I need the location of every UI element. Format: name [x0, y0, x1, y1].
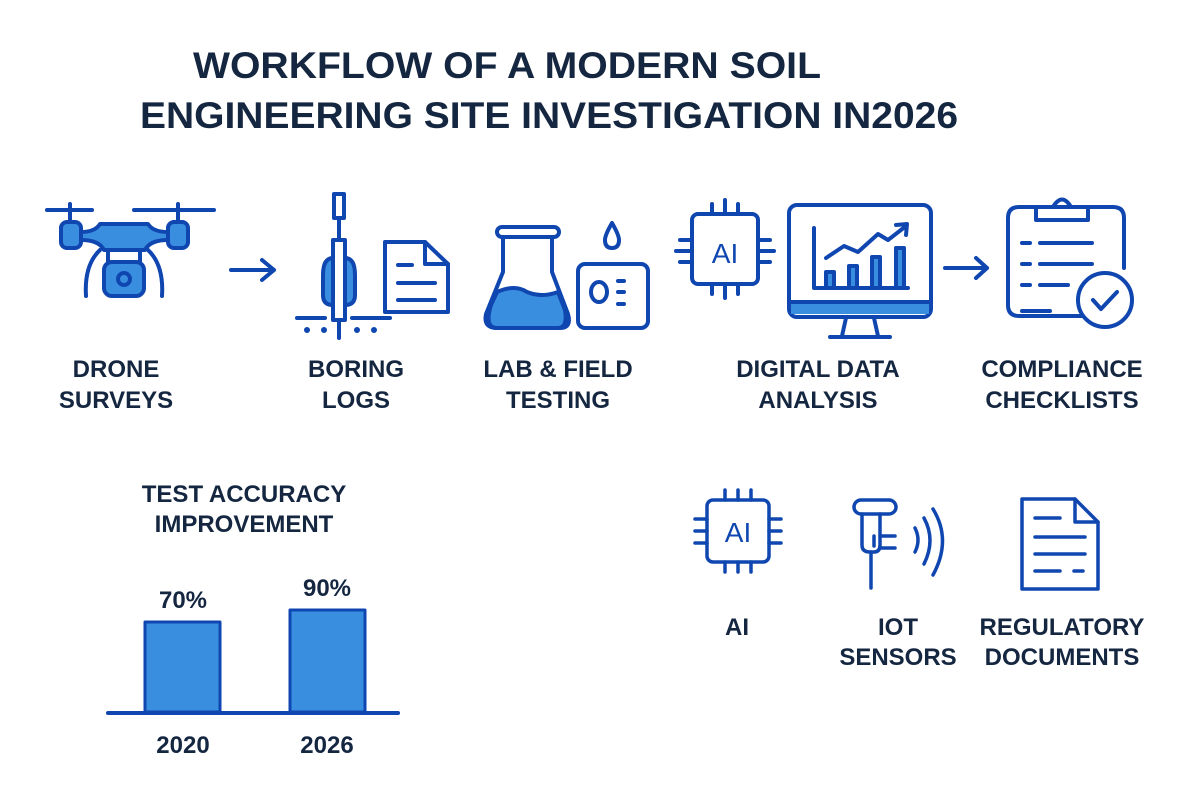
- chip text: [712, 238, 751, 548]
- icon: regulatory document: [1022, 499, 1098, 589]
- labels: technologies: AI: [725, 614, 749, 641]
- labels: workflow steps: LOGS: [322, 387, 390, 414]
- labels: workflow steps: LAB & FIELD: [483, 356, 633, 383]
- labels: workflow steps: CHECKLISTS: [985, 387, 1139, 414]
- arrow 2: [945, 258, 987, 278]
- labels: workflow steps: DIGITAL DATA: [736, 356, 900, 383]
- labels: workflow steps: BORING: [308, 356, 404, 383]
- labels: workflow steps: TESTING: [506, 387, 610, 414]
- chart values and years: 70%: [159, 587, 207, 614]
- icon: AI chip: [676, 200, 774, 298]
- chart values and years: 2026: [300, 732, 354, 759]
- labels: workflow steps: DRONE: [73, 356, 159, 383]
- labels: technologies: DOCUMENTS: [985, 644, 1139, 671]
- chart values and years: 90%: [303, 575, 351, 602]
- title: [140, 45, 958, 136]
- icon: IoT sensor: [854, 500, 942, 588]
- icon: boring rig: [297, 194, 448, 338]
- chart title: IMPROVEMENT: [155, 511, 334, 538]
- labels: workflow steps: COMPLIANCE: [981, 356, 1143, 383]
- labels: workflow steps: ANALYSIS: [758, 387, 878, 414]
- chip text: AI: [712, 238, 738, 269]
- chart title: TEST ACCURACY: [142, 481, 346, 508]
- arrow 1: [231, 260, 274, 280]
- icon: flask and tester: [485, 223, 648, 328]
- labels: technologies: IOT: [878, 614, 918, 641]
- labels: workflow steps: [59, 356, 1143, 414]
- labels: workflow steps: SURVEYS: [59, 387, 173, 414]
- icon: compliance clipboard: [1008, 200, 1132, 327]
- title: ENGINEERING SITE INVESTIGATION IN2026: [140, 95, 958, 136]
- icon: monitor chart: [789, 205, 931, 337]
- labels: technologies: [725, 614, 1144, 671]
- chip text: AI: [725, 517, 751, 548]
- bar chart: [108, 610, 398, 713]
- icon: AI chip small: [695, 490, 781, 572]
- chart values and years: [156, 575, 354, 759]
- icon: drone: [47, 204, 214, 296]
- title: WORKFLOW OF A MODERN SOIL: [193, 45, 821, 86]
- labels: technologies: SENSORS: [839, 644, 957, 671]
- labels: technologies: REGULATORY: [980, 614, 1144, 641]
- chart title: [142, 481, 346, 538]
- chart values and years: 2020: [156, 732, 210, 759]
